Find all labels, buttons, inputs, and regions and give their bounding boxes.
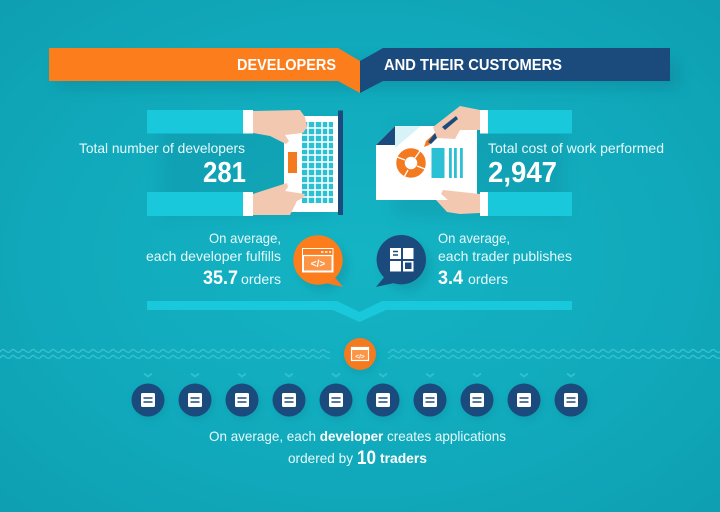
- icon: grid bubble: [376, 235, 431, 291]
- caption: [209, 428, 506, 469]
- header banner: [49, 48, 678, 93]
- text: developer average orders: each developer fulfills: [146, 248, 281, 264]
- banner: developers: DEVELOPERS: [237, 57, 336, 74]
- illustration: hands on document: [376, 106, 572, 216]
- banner: and their customers: [360, 48, 670, 93]
- banner: developers: [49, 48, 360, 93]
- wave band: [0, 348, 720, 360]
- row: trader icons: [132, 374, 589, 419]
- text: trader average orders: [438, 230, 572, 289]
- caption: 10: [357, 448, 376, 469]
- text: trader average orders: On average,: [438, 230, 510, 246]
- icon: code window bubble: [293, 235, 348, 291]
- arrow: chevron divider: [147, 301, 572, 322]
- text: developer average orders: [146, 230, 281, 289]
- panel: developers total: [79, 110, 343, 217]
- panel: developer average: [146, 230, 348, 291]
- panel: trader average: [376, 230, 572, 291]
- text: developer average orders: 35.7: [203, 268, 238, 289]
- label: total developers: Total number of developers: [79, 140, 245, 156]
- caption: traders: [380, 450, 427, 466]
- text: trader average orders: 3.4: [438, 268, 463, 289]
- caption: ordered by: [288, 450, 353, 466]
- text: trader average orders: each trader publishes: [438, 248, 572, 264]
- icon: developer code badge: </>: [355, 354, 365, 360]
- text: developer average orders: orders: [241, 271, 281, 287]
- panel: total cost: [376, 106, 664, 217]
- icon: code window bubble: </>: [311, 259, 325, 270]
- illustration: hands on laptop: [147, 110, 343, 216]
- text: developer average orders: On average,: [209, 230, 281, 246]
- label: total cost: Total cost of work performed: [488, 140, 664, 156]
- value: 281: 281: [203, 157, 246, 189]
- caption: On average, each developer creates applications: [209, 428, 506, 444]
- icon: developer code badge: [344, 338, 377, 373]
- value: 2,947: 2,947: [488, 157, 557, 189]
- banner: and their customers: AND THEIR CUSTOMERS: [384, 57, 562, 74]
- chart: donut: [397, 151, 425, 177]
- text: trader average orders: orders: [468, 271, 508, 287]
